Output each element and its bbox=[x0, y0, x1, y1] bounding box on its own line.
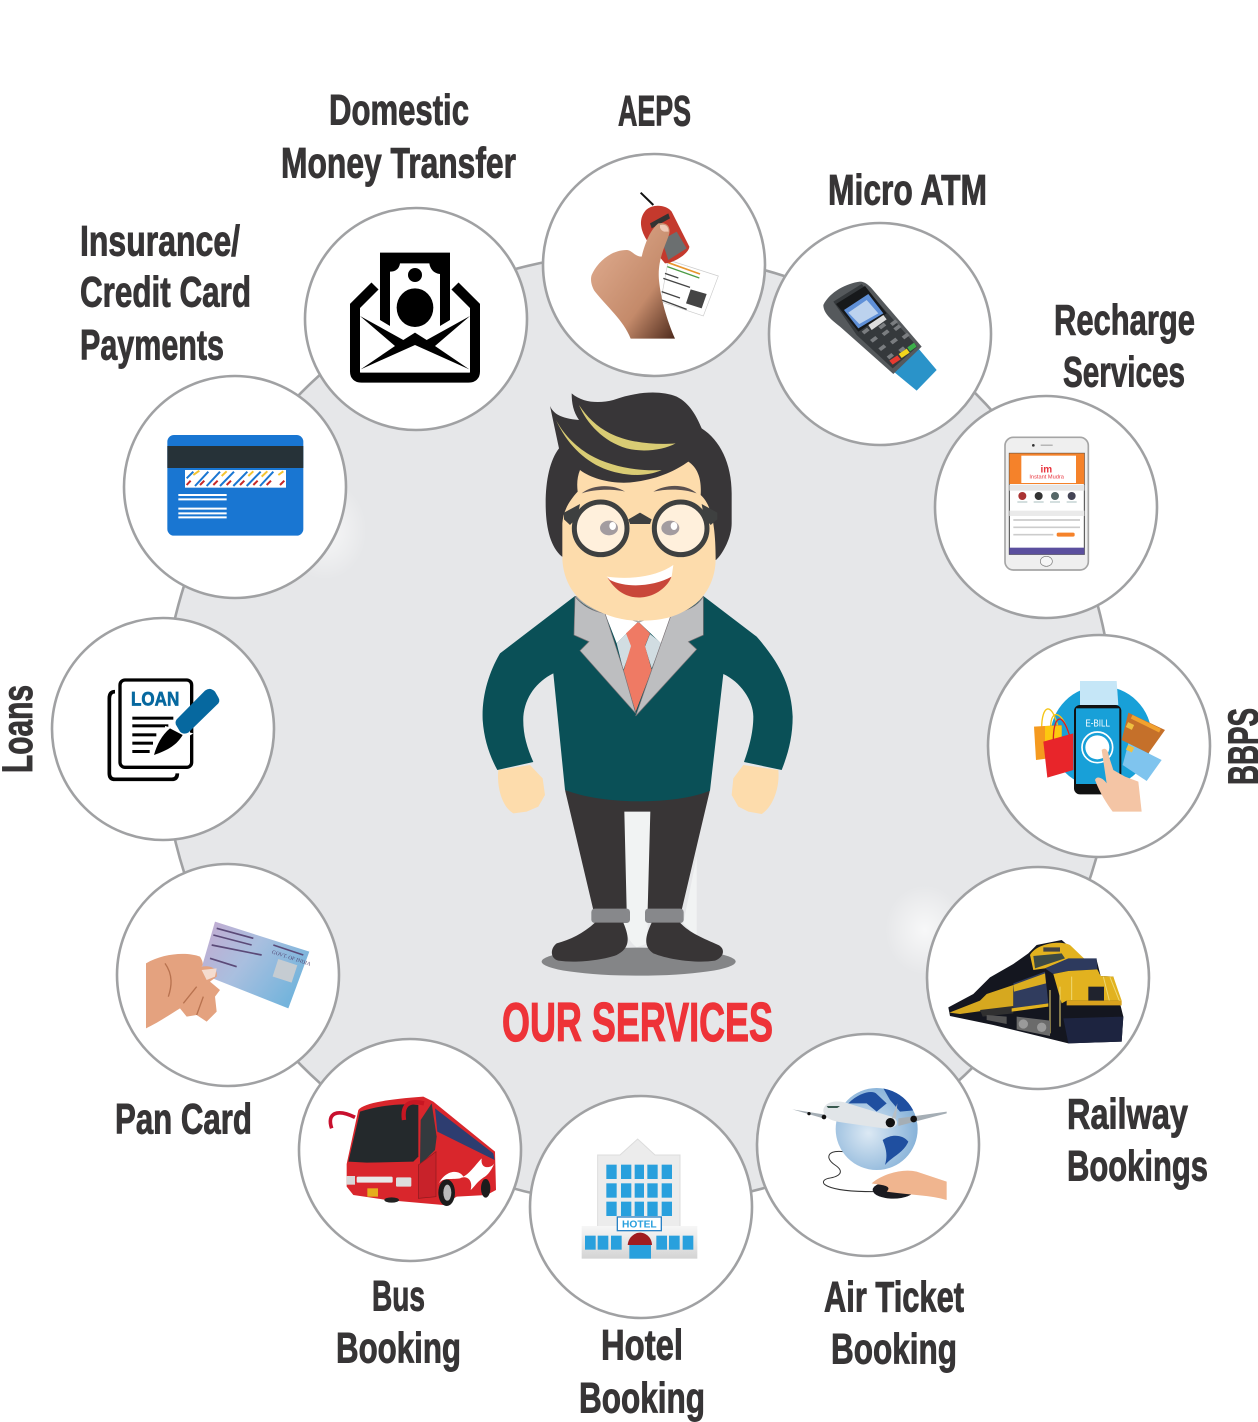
mouth bbox=[607, 565, 673, 597]
shirt bbox=[605, 613, 672, 670]
icon: e-bill payment bbox=[1034, 681, 1165, 812]
circle bbox=[117, 864, 339, 1086]
icon: e-bill payment: E-BILL bbox=[1085, 719, 1110, 730]
panel: insurance / credit card payments bbox=[80, 218, 346, 598]
label bbox=[281, 86, 516, 188]
icon: phone with app bbox=[1005, 437, 1088, 570]
icon: credit card back bbox=[167, 435, 303, 536]
circle bbox=[124, 376, 346, 598]
label bbox=[1054, 296, 1195, 396]
icon: hotel building: HOTEL bbox=[622, 1220, 657, 1231]
label: Domestic bbox=[329, 86, 469, 134]
face bbox=[562, 462, 716, 621]
eyebrows bbox=[582, 486, 697, 493]
circle bbox=[543, 154, 765, 376]
circle bbox=[769, 223, 991, 445]
icon: phone with app: im bbox=[1041, 465, 1052, 476]
trousers bbox=[565, 790, 710, 910]
label: Micro ATM bbox=[828, 166, 987, 214]
circle bbox=[927, 867, 1149, 1089]
label: Booking bbox=[579, 1374, 705, 1422]
label bbox=[336, 1272, 461, 1372]
icon: plane, globe and mouse bbox=[792, 1088, 947, 1200]
label: Air Ticket bbox=[824, 1274, 964, 1322]
label: Services bbox=[1063, 348, 1185, 396]
hands bbox=[498, 765, 779, 814]
icon: card terminal bbox=[823, 282, 937, 391]
panel: aeps bbox=[543, 88, 765, 376]
circle bbox=[988, 635, 1210, 857]
icon: locomotive bbox=[948, 940, 1123, 1043]
panel: hotel booking bbox=[530, 1096, 752, 1422]
chin shadow line bbox=[576, 596, 702, 622]
icon: hand holding pan card: GOVT. OF INDIA bbox=[271, 950, 311, 968]
label: Money Transfer bbox=[281, 140, 516, 188]
hair bbox=[546, 393, 732, 560]
hair highlights bbox=[556, 405, 676, 475]
label: Booking bbox=[336, 1324, 461, 1372]
gap between legs bbox=[623, 812, 697, 947]
label: Credit Card bbox=[80, 268, 251, 316]
label bbox=[824, 1274, 964, 1374]
lapels bbox=[574, 597, 703, 716]
label: Insurance/ bbox=[80, 218, 240, 266]
panel: recharge services bbox=[935, 296, 1195, 618]
panel: domestic money transfer bbox=[281, 86, 527, 430]
label bbox=[80, 218, 251, 370]
circle bbox=[757, 1034, 979, 1256]
label: AEPS bbox=[618, 88, 691, 136]
circle bbox=[299, 1039, 521, 1261]
circle bbox=[530, 1096, 752, 1318]
label: Payments bbox=[80, 322, 224, 370]
icon: loan document with pen bbox=[109, 680, 219, 779]
panel: railway bookings bbox=[927, 867, 1208, 1190]
jacket bbox=[483, 596, 793, 801]
icon: phone with app: Instant Mudra bbox=[1029, 475, 1065, 481]
icon: envelope with banknote bbox=[355, 253, 475, 378]
label bbox=[579, 1322, 705, 1422]
trouser cuffs bbox=[591, 909, 684, 923]
soft glow near card circle bbox=[283, 480, 367, 580]
panel: pan card bbox=[115, 864, 339, 1144]
icon: hotel building bbox=[582, 1139, 697, 1259]
character: businessman bbox=[483, 393, 793, 976]
label: Railway bbox=[1067, 1090, 1188, 1138]
soft glow near railway circle bbox=[885, 885, 965, 975]
panel: loans bbox=[0, 618, 274, 840]
label bbox=[1067, 1090, 1208, 1190]
icon: fingerprint scanner with id card bbox=[591, 193, 718, 339]
panel: bus booking bbox=[299, 1039, 521, 1372]
panel: micro atm bbox=[769, 166, 991, 445]
label: Bookings bbox=[1067, 1142, 1208, 1190]
label: Pan Card bbox=[115, 1096, 252, 1144]
central background disc bbox=[162, 253, 1114, 1205]
icon: hand holding pan card bbox=[146, 922, 311, 1028]
label: Bus bbox=[372, 1272, 425, 1320]
title: our services: OUR SERVICES bbox=[502, 991, 773, 1053]
label: Booking bbox=[831, 1326, 957, 1374]
circle bbox=[935, 396, 1157, 618]
label: Hotel bbox=[601, 1322, 683, 1370]
tie bbox=[623, 622, 652, 712]
shoes bbox=[552, 923, 723, 962]
icon: loan document with pen: LOAN bbox=[131, 690, 179, 711]
glasses bbox=[564, 502, 717, 555]
icon: red bus bbox=[330, 1097, 496, 1206]
circle bbox=[305, 208, 527, 430]
eyes bbox=[600, 521, 679, 535]
floor shadow bbox=[542, 948, 736, 976]
panel: air ticket booking bbox=[757, 1034, 979, 1374]
panel: bbps bbox=[988, 635, 1258, 857]
circle bbox=[52, 618, 274, 840]
label: Recharge bbox=[1054, 296, 1195, 344]
